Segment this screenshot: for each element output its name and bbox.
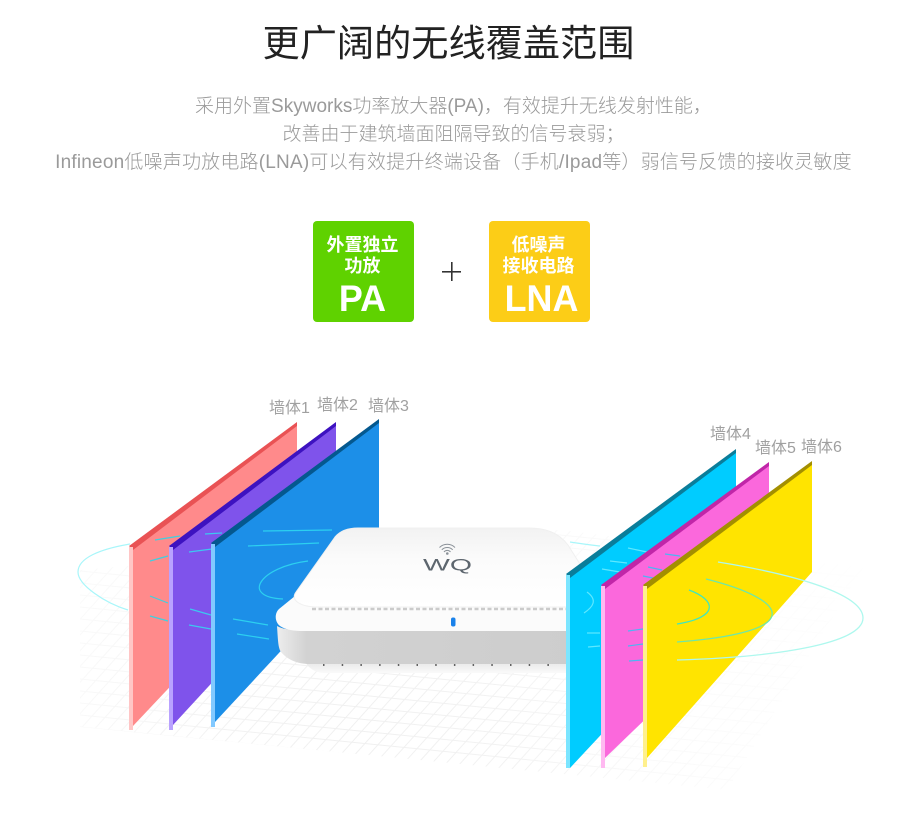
badge: PA: 外置独立 — [326, 234, 398, 254]
logo: WQ — [423, 556, 472, 574]
description text: 改善由于建筑墙面阻隔导致的信号衰弱； — [282, 124, 624, 145]
badge: LNA: LNA — [505, 278, 578, 318]
wall 4 — [566, 449, 736, 768]
badge: PA: PA — [339, 278, 386, 318]
wall 3 — [211, 419, 379, 727]
wall labels — [269, 396, 842, 457]
router top plate — [294, 528, 590, 607]
wall labels: 墙体2 — [317, 396, 358, 414]
wall 1 signal arcs — [150, 536, 180, 621]
router — [276, 528, 590, 673]
router foot — [304, 660, 575, 673]
wall labels: 墙体4 — [710, 425, 751, 443]
wall 3 signal arcs — [233, 530, 332, 639]
description text — [55, 96, 852, 173]
badge: LNA: 接收电路 — [502, 256, 574, 276]
wall 5 — [601, 462, 769, 768]
description text: Infineon低噪声功放电路(LNA)可以有效提升终端设备（手机/Ipad等）弱信号反馈的接收灵敏度 — [55, 152, 852, 173]
floor grid — [121, 657, 600, 776]
badge: PA: 功放 — [344, 256, 380, 276]
wall 4 signal arcs — [584, 548, 647, 647]
router side band — [277, 626, 575, 664]
router lower body — [276, 596, 575, 631]
wall 2 — [169, 422, 336, 730]
title: 更广阔的无线覆盖范围 — [263, 22, 634, 64]
badge: LNA: 低噪声 — [512, 234, 566, 254]
wall 6 — [643, 461, 863, 767]
wall diagram — [77, 396, 864, 776]
router bottom dots — [323, 664, 575, 666]
status LED — [451, 618, 456, 626]
wall 2 signal arcs — [189, 533, 222, 629]
plus sign — [442, 262, 461, 281]
wifi icon — [440, 544, 455, 554]
badge: PA — [313, 221, 414, 322]
wall labels: 墙体3 — [368, 397, 409, 415]
router vent row — [312, 608, 575, 610]
wall 6 signal arcs — [677, 562, 863, 660]
wall labels: 墙体6 — [801, 438, 842, 456]
description text: 采用外置Skyworks功率放大器(PA)，有效提升无线发射性能， — [195, 96, 712, 117]
badge: LNA — [489, 221, 590, 322]
wall labels: 墙体5 — [755, 439, 796, 457]
wall labels: 墙体1 — [269, 399, 310, 417]
wall 1 — [129, 422, 297, 730]
signal ring behind walls — [78, 542, 600, 610]
wall 5 signal arcs — [628, 554, 680, 661]
